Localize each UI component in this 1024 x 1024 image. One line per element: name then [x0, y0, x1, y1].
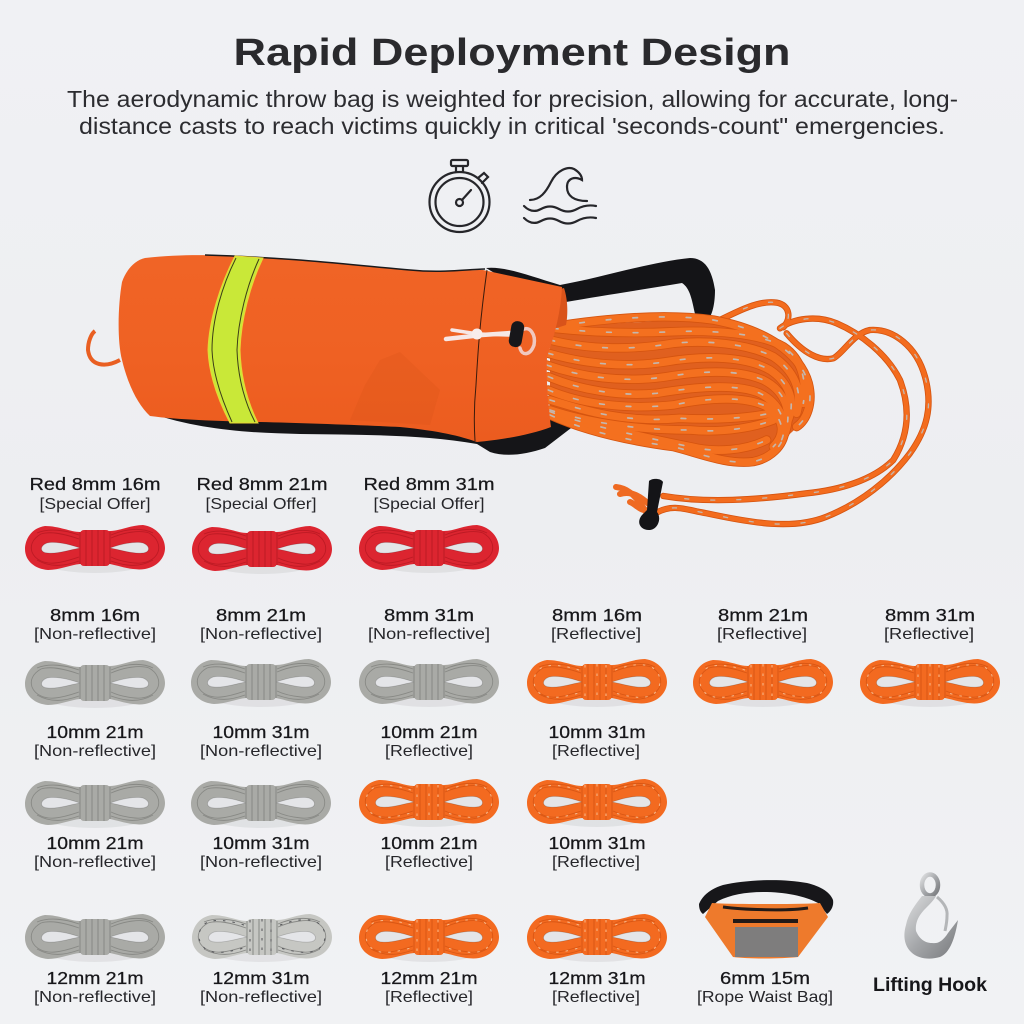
label row: 10mm options: 10mm 21m — [46, 833, 144, 853]
rope option: 10mm 31m non-reflective: [Non-reflective] — [200, 743, 322, 760]
orange pouch — [705, 903, 828, 958]
bag inner lip — [550, 288, 567, 330]
reflective stripe — [208, 256, 263, 423]
rope option: 8mm 21m reflective: [Reflective] — [717, 626, 807, 643]
icon: stopwatch — [430, 160, 490, 232]
rope option: 12mm 21m reflective: [Reflective] — [385, 989, 473, 1006]
label row: 10mm options: [Reflective] — [385, 854, 473, 871]
rope option: 10mm 21m non-reflective: [Non-reflective] — [34, 743, 156, 760]
rope option: 8mm 16m non-reflective — [25, 605, 165, 708]
rope option: 8mm 31m non-reflective: [Non-reflective] — [368, 626, 490, 643]
subtitle text block: The aerodynamic throw bag is weighted for precision, allowing for accurate, long- — [67, 86, 958, 112]
subtitle text block — [67, 86, 958, 139]
white drawcord — [446, 328, 534, 354]
bag seam — [474, 270, 487, 441]
rope option: 8mm 31m reflective — [860, 605, 1000, 707]
front pocket zipper — [733, 919, 798, 923]
product: rope waist bag — [699, 880, 833, 958]
bag shading facets — [350, 352, 440, 425]
hook body — [904, 896, 958, 959]
product: lifting hook — [904, 874, 958, 959]
rope option: 12mm 31m reflective: 12mm 31m — [548, 968, 646, 988]
rope option: Red 8mm 31m: [Special Offer] — [374, 496, 484, 513]
title: Rapid Deployment Design — [234, 32, 790, 74]
rope option: 8mm 21m non-reflective: 8mm 21m — [216, 605, 306, 625]
rope option: 10mm 31m non-reflective: 10mm 31m — [212, 722, 310, 742]
rope option: 12mm 31m non-reflective — [192, 914, 332, 1006]
rope option: 8mm 21m reflective: 8mm 21m — [718, 605, 808, 625]
label: 6mm 15m rope waist bag: [Rope Waist Bag] — [697, 989, 833, 1006]
orange bag body — [119, 255, 562, 442]
label: 6mm 15m rope waist bag: 6mm 15m — [720, 968, 810, 988]
label row: 10mm options: [Non-reflective] — [200, 854, 322, 871]
rope option: 8mm 21m non-reflective — [191, 605, 331, 707]
rope option: 10mm 31m reflective — [527, 722, 667, 827]
rope option: Red 8mm 16m — [25, 474, 165, 573]
rope option: 12mm 31m non-reflective: 12mm 31m — [212, 968, 310, 988]
label: lifting hook: Lifting Hook — [873, 975, 987, 996]
rope option: 8mm 21m reflective — [693, 605, 833, 707]
grey reflective panel — [735, 927, 798, 957]
hook latch — [937, 897, 947, 931]
rope option: 12mm 31m reflective: [Reflective] — [552, 989, 640, 1006]
product: throw bag with rope — [88, 255, 929, 530]
rope option: 8mm 16m non-reflective: [Non-reflective] — [34, 626, 156, 643]
rope option: 8mm 31m reflective: [Reflective] — [884, 626, 974, 643]
stripe stitching — [212, 258, 259, 422]
rope option: 12mm 21m reflective: 12mm 21m — [380, 968, 478, 988]
rope option: Red 8mm 31m — [359, 474, 499, 573]
rope option: Red 8mm 21m: Red 8mm 21m — [196, 474, 328, 494]
rope option: 12mm 21m non-reflective: [Non-reflective] — [34, 989, 156, 1006]
rope option: 10mm 31m reflective: 10mm 31m — [548, 722, 646, 742]
icon: ocean wave — [524, 168, 596, 224]
rope option: 10mm 31m reflective: [Reflective] — [552, 743, 640, 760]
rope option: 10mm 21m reflective: [Reflective] — [385, 743, 473, 760]
black rope stopper — [639, 479, 663, 530]
label row: 10mm options: 10mm 31m — [548, 833, 646, 853]
label row: 10mm options: [Non-reflective] — [34, 854, 156, 871]
waist belt — [699, 880, 833, 914]
rope option: 8mm 16m reflective — [527, 605, 667, 707]
label row: 10mm options: 10mm 21m — [380, 833, 478, 853]
black lower strap — [150, 408, 575, 455]
black cord toggle — [508, 320, 525, 348]
rope option: 10mm 21m reflective — [359, 722, 499, 827]
rope end knot — [616, 487, 650, 512]
rope option: 12mm 21m non-reflective: 12mm 21m — [46, 968, 144, 988]
rope option: Red 8mm 16m: [Special Offer] — [40, 496, 150, 513]
bag top edge piping — [205, 255, 485, 271]
coiled orange rope — [547, 302, 929, 524]
rope option: Red 8mm 16m: Red 8mm 16m — [30, 474, 160, 494]
rope option: 8mm 31m non-reflective — [359, 605, 499, 707]
rope option: 12mm 21m reflective — [359, 914, 499, 1006]
label row: 10mm options: 10mm 31m — [212, 833, 310, 853]
rope option: 8mm 21m non-reflective: [Non-reflective] — [200, 626, 322, 643]
rope option: 8mm 31m reflective: 8mm 31m — [885, 605, 975, 625]
rope option: 10mm 21m reflective: 10mm 21m — [380, 722, 478, 742]
hook eye — [922, 874, 938, 896]
rope option: 10mm 31m non-reflective — [191, 722, 331, 828]
rope option: Red 8mm 21m: [Special Offer] — [206, 496, 316, 513]
black carry strap — [486, 258, 715, 320]
label row: 10mm options: [Reflective] — [552, 854, 640, 871]
rope option: 10mm 21m non-reflective — [25, 722, 165, 828]
label row: 10mm options — [34, 833, 646, 871]
label: 6mm 15m rope waist bag — [697, 968, 833, 1006]
rope option: 8mm 16m reflective: [Reflective] — [551, 626, 641, 643]
rope option: 8mm 16m reflective: 8mm 16m — [552, 605, 642, 625]
rope option: 12mm 21m non-reflective — [25, 914, 165, 1006]
left loop tab — [88, 331, 120, 365]
rope option: Red 8mm 21m — [192, 474, 332, 574]
rope option: 10mm 21m non-reflective: 10mm 21m — [46, 722, 144, 742]
rope option: 8mm 16m non-reflective: 8mm 16m — [50, 605, 140, 625]
rope option: 12mm 31m non-reflective: [Non-reflective] — [200, 989, 322, 1006]
top zipper — [723, 907, 808, 910]
rope option: 12mm 31m reflective — [527, 914, 667, 1006]
rope option: 8mm 31m non-reflective: 8mm 31m — [384, 605, 474, 625]
subtitle text block: distance casts to reach victims quickly in critical 'seconds-count" emergencies. — [79, 113, 945, 139]
rope option: Red 8mm 31m: Red 8mm 31m — [364, 474, 494, 494]
